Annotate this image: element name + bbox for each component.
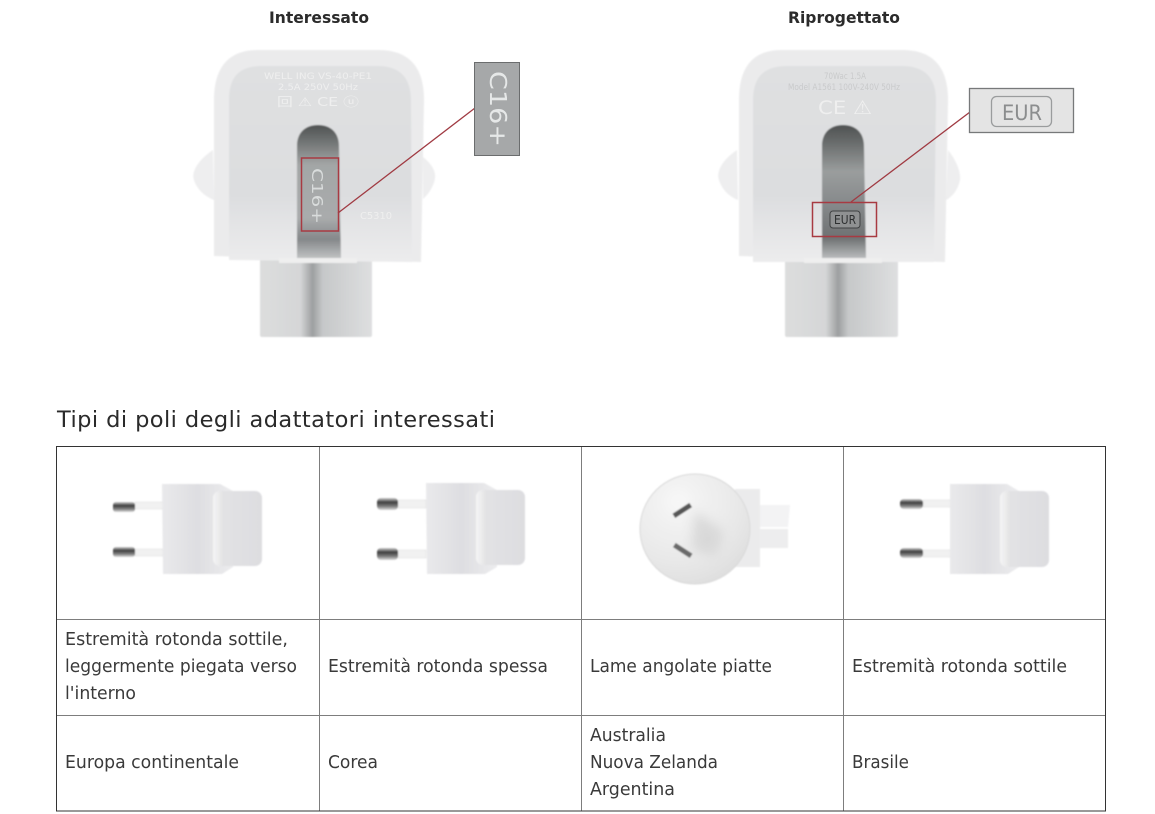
embossed markings: CE ⚠ bbox=[818, 97, 872, 119]
cell: Australia, Nuova Zelanda, Argentina bbox=[590, 726, 718, 800]
cell: Brasile: Brasile bbox=[852, 753, 909, 773]
cell: thin round bent description bbox=[65, 630, 297, 704]
cell: Europa continentale: Europa continentale bbox=[65, 753, 239, 773]
cell: flat blades description: Lame angolate piatte bbox=[590, 657, 772, 677]
red highlight box bbox=[302, 158, 338, 231]
embossed markings: Model A1561 100V-240V 50Hz bbox=[788, 83, 900, 93]
cell: thick round description: Estremità rotonda spessa bbox=[328, 657, 548, 677]
embossed markings: 2.5A 250V 50Hz bbox=[278, 83, 358, 93]
callout line bbox=[338, 108, 475, 213]
plug image: thin round, bent bbox=[113, 484, 262, 574]
red highlight box bbox=[812, 202, 876, 236]
cell: thin round bent description: l'interno bbox=[65, 684, 136, 704]
embossed markings: C5310 bbox=[360, 211, 392, 222]
zoom inset: EUR bbox=[970, 88, 1074, 132]
cell: Australia, Nuova Zelanda, Argentina: Australia bbox=[590, 726, 666, 746]
embossed markings: 70Wac 1.5A bbox=[824, 72, 867, 82]
heading: Interessato: Interessato bbox=[269, 8, 369, 27]
plug image: thin round bbox=[900, 484, 1049, 574]
embossed markings bbox=[264, 72, 392, 222]
adapter photo: affected bbox=[193, 50, 519, 337]
zoom inset: EUR: EUR bbox=[1002, 101, 1042, 125]
section title: Tipi di poli degli adattatori interessati bbox=[56, 407, 495, 433]
embossed markings: 回 ⚠ CE ⓤ bbox=[277, 95, 359, 109]
plug image: thick round bbox=[377, 483, 525, 574]
slot code engraving: C16+ bbox=[308, 168, 326, 224]
plug image: flat angled blades bbox=[640, 474, 790, 584]
small EUR mark: EUR bbox=[834, 213, 856, 227]
cell: thin round bent description: Estremità rotonda sottile, bbox=[65, 630, 288, 650]
cell: Australia, Nuova Zelanda, Argentina: Nuova Zelanda bbox=[590, 753, 718, 773]
cell: thin round bent description: leggermente piegata verso bbox=[65, 657, 297, 677]
embossed markings bbox=[788, 72, 900, 119]
small EUR mark bbox=[830, 211, 860, 228]
table: pole types bbox=[56, 446, 1106, 811]
zoom inset: engraved code: C16+ bbox=[484, 71, 510, 147]
table grid bbox=[56, 446, 1106, 811]
callout line bbox=[851, 112, 970, 202]
zoom inset: engraved code bbox=[474, 62, 520, 156]
heading: Riprogettato: Riprogettato bbox=[788, 8, 900, 27]
adapter photo: redesigned bbox=[718, 50, 1074, 337]
cell: Corea: Corea bbox=[328, 753, 378, 773]
cell: Australia, Nuova Zelanda, Argentina: Argentina bbox=[590, 780, 675, 800]
cell: thin round description: Estremità rotonda sottile bbox=[852, 657, 1067, 677]
embossed markings: WELL ING VS-40-PE1 bbox=[264, 72, 372, 82]
